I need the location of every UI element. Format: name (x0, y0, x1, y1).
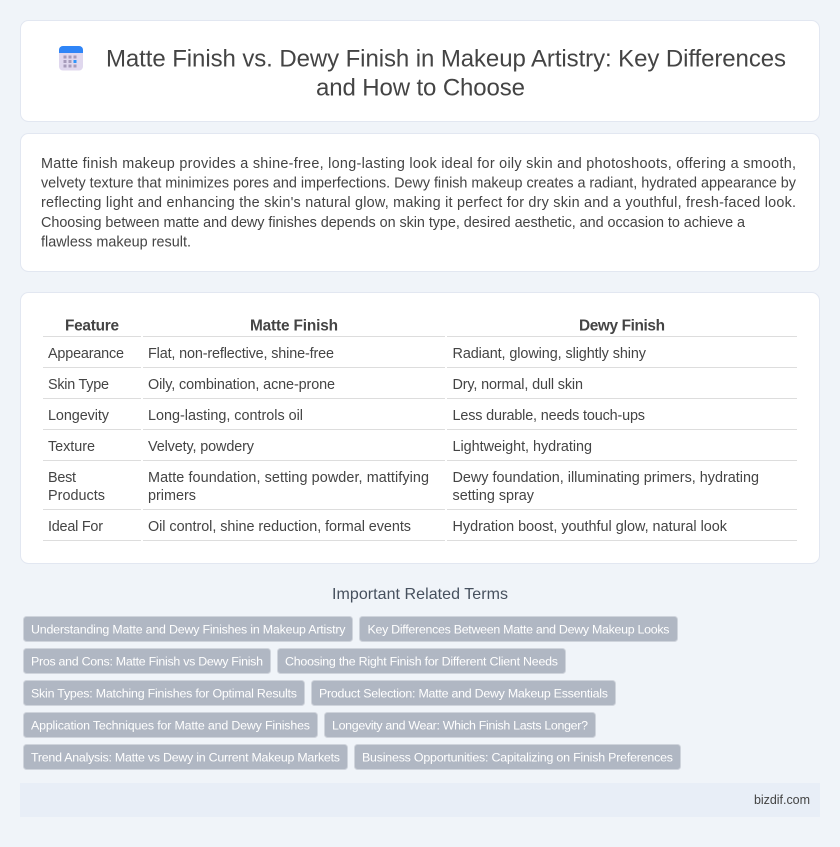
footer: bizdif.com (754, 793, 810, 807)
tag (24, 744, 348, 770)
tag (24, 680, 304, 706)
table row: ideal for: Oil control, shine reduction, formal events (148, 519, 411, 535)
tag: Understanding Matte and Dewy Finishes in Makeup Artistry (31, 622, 346, 636)
table row: appearance: Radiant, glowing, slightly shiny (452, 346, 647, 362)
table row: appearance: Flat, non-reflective, shine-free (148, 346, 334, 362)
tag: Longevity and Wear: Which Finish Lasts Longer? (332, 718, 588, 732)
text block: introduction: flawless makeup result. (41, 234, 191, 250)
tag (360, 616, 678, 642)
title: Matte Finish vs. Dewy Finish in Makeup Artistry: Key Differences (106, 46, 786, 72)
tag: Pros and Cons: Matte Finish vs Dewy Finish (31, 654, 263, 668)
text block: introduction: Choosing between matte and dewy finishes depends on skin type, desired aesthetic, and occasion to achieve a (41, 215, 745, 231)
table row: texture (43, 439, 797, 461)
tag: Application Techniques for Matte and Dewy Finishes (31, 718, 310, 732)
table row: appearance (43, 346, 797, 368)
tag (354, 744, 680, 770)
table header: Matte Finish (250, 318, 338, 334)
table row: ideal for: Ideal For (48, 519, 103, 535)
table row: longevity: Long-lasting, controls oil (148, 408, 303, 424)
tag: Key Differences Between Matte and Dewy Makeup Looks (368, 622, 670, 636)
table row: best products: Matte foundation, setting powder, mattifying (148, 470, 429, 486)
tag (24, 616, 352, 642)
table row: texture: Lightweight, hydrating (452, 439, 592, 455)
table row: best products: Best (48, 470, 76, 486)
text block: introduction: reflecting light and enhancing the skin's natural glow, making it perfect for dry skin and a youthful, fresh-faced look. (41, 195, 796, 211)
table header: Dewy Finish (579, 318, 665, 334)
tag (324, 712, 596, 738)
tag: Skin Types: Matching Finishes for Optimal Results (31, 686, 297, 700)
tag: Product Selection: Matte and Dewy Makeup Essentials (319, 686, 608, 700)
table row: skin type: Skin Type (48, 377, 109, 393)
table header (43, 318, 797, 337)
table row: texture: Texture (48, 439, 95, 455)
panel: header (20, 20, 820, 122)
table row: skin type: Oily, combination, acne-prone (148, 377, 335, 393)
table row: best products: setting spray (452, 488, 535, 504)
table header: Feature (65, 318, 119, 334)
text block: introduction: Matte finish makeup provides a shine-free, long-lasting look ideal for oily skin and photoshoots, offering a smooth, (41, 156, 796, 172)
tags: related terms (24, 616, 680, 770)
table row: skin type: Dry, normal, dull skin (452, 377, 583, 393)
table row: appearance: Appearance (48, 346, 124, 362)
tag (24, 712, 318, 738)
panel: introduction (20, 134, 820, 272)
tag (312, 680, 616, 706)
table row: best products: primers (148, 488, 196, 504)
table row: ideal for: Hydration boost, youthful glow, natural look (452, 519, 728, 535)
heading: important related terms: Important Related Terms (332, 586, 508, 603)
title (106, 46, 786, 102)
table row: ideal for (43, 519, 797, 541)
tag: Trend Analysis: Matte vs Dewy in Current Makeup Markets (31, 750, 340, 764)
title: and How to Choose (316, 74, 525, 102)
tag: Business Opportunities: Capitalizing on Finish Preferences (362, 750, 673, 764)
table row: best products (43, 470, 797, 510)
table row: longevity (43, 408, 797, 430)
text block: introduction (41, 156, 797, 250)
table row: longevity: Less durable, needs touch-ups (452, 408, 645, 424)
table row: best products: Products (48, 488, 105, 504)
icon: calendar (59, 46, 83, 70)
table row: texture: Velvety, powdery (148, 439, 255, 455)
footer (20, 783, 820, 817)
table row: skin type (43, 377, 797, 399)
text block: introduction: velvety texture that minimizes pores and imperfections. Dewy finish makeup creates a radiant, hydrated appearance by (41, 176, 797, 192)
tag (24, 648, 270, 674)
table row: longevity: Longevity (48, 408, 110, 424)
panel: comparison table (20, 292, 820, 564)
tag: Choosing the Right Finish for Different Client Needs (285, 654, 558, 668)
tag (278, 648, 566, 674)
table row: best products: Dewy foundation, illuminating primers, hydrating (452, 470, 759, 486)
